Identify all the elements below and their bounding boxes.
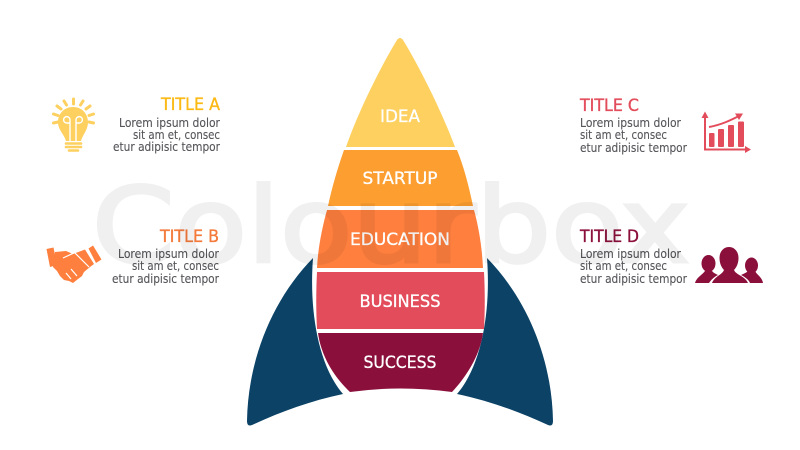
- block: title B: [112, 227, 220, 286]
- segment: education: EDUCATION: [350, 230, 450, 250]
- rocket fin: left: [247, 258, 343, 426]
- icon: group of people: [695, 247, 763, 283]
- block: title D: TITLE D: [579, 227, 639, 247]
- block: title B: TITLE B: [159, 227, 219, 247]
- icon: bar chart with arrow: [702, 112, 751, 153]
- block: title C: etur adipisic tempor: [580, 140, 688, 155]
- segment: business: BUSINESS: [360, 292, 440, 312]
- segment: startup: [328, 150, 473, 206]
- watermark: Colourbox: [92, 165, 690, 287]
- rocket fin: right: [457, 258, 553, 426]
- block: title B: Lorem ipsum dolor: [118, 246, 220, 261]
- block: title C: sit am et, consec: [580, 127, 667, 142]
- icon: handshake: [46, 246, 102, 283]
- segment: success: [318, 333, 483, 392]
- block: title C: Lorem ipsum dolor: [580, 115, 682, 130]
- block: title A: TITLE A: [160, 95, 220, 115]
- segment: idea: [346, 38, 455, 147]
- block: title D: etur adipisic tempor: [580, 271, 688, 286]
- segment: success: SUCCESS: [364, 353, 436, 373]
- block: title A: Lorem ipsum dolor: [119, 115, 221, 130]
- segment: startup: STARTUP: [362, 169, 438, 189]
- icon: light bulb: [54, 99, 94, 150]
- block: title D: sit am et, consec: [580, 258, 667, 273]
- segment: business: [316, 272, 485, 329]
- block: title B: etur adipisic tempor: [112, 271, 220, 286]
- block: title D: Lorem ipsum dolor: [580, 246, 682, 261]
- block: title C: TITLE C: [579, 96, 639, 116]
- block: title A: sit am et, consec: [133, 127, 220, 142]
- block: title D: [579, 227, 688, 286]
- panel: rocket: [247, 38, 553, 426]
- block: title B: sit am et, consec: [132, 258, 219, 273]
- block: title C: [579, 96, 688, 155]
- segment: education: [317, 210, 483, 268]
- block: title A: [113, 95, 221, 154]
- segment: idea: IDEA: [380, 107, 420, 127]
- block: title A: etur adipisic tempor: [113, 139, 221, 154]
